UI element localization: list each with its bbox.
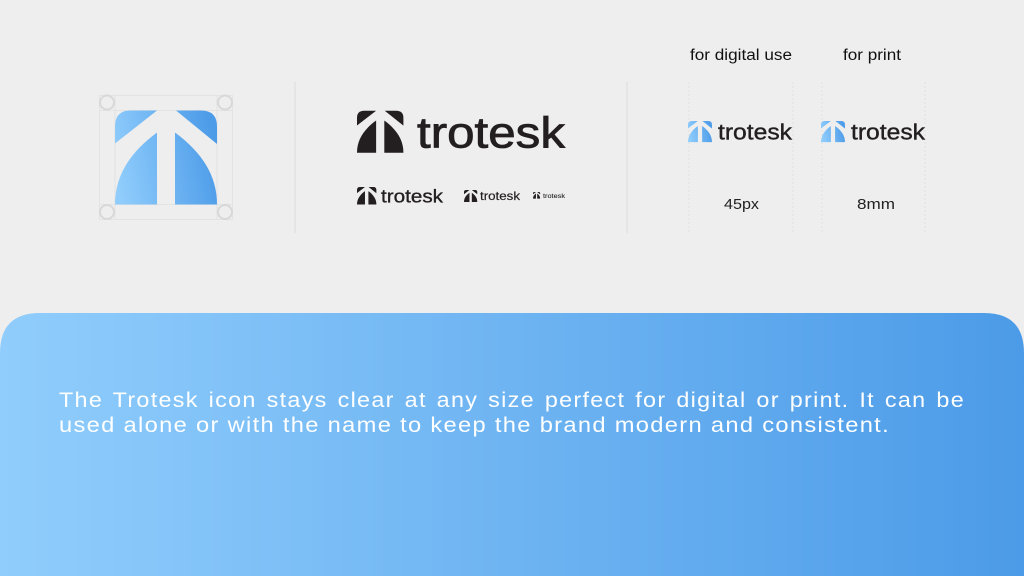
divider left — [294, 82, 296, 233]
heading: for print: for print — [843, 47, 902, 64]
logo: digital gradient — [688, 120, 793, 144]
heading: for digital use: for digital use — [690, 47, 792, 64]
logo: tiny black: trotesk — [543, 193, 566, 200]
label: 45px: 45px — [724, 196, 760, 213]
panel: gradient description — [0, 313, 1024, 576]
logo: small black — [464, 189, 521, 203]
logo: print gradient: trotesk — [851, 120, 926, 144]
icon construction grid — [99, 95, 233, 220]
logo: tiny black — [533, 192, 566, 200]
logo: medium black: trotesk — [381, 186, 444, 206]
logo: medium black — [357, 186, 444, 206]
description text: The Trotesk icon stays clear at any size perfect for digital or print. It can be — [59, 388, 965, 412]
logo: print gradient — [821, 120, 926, 144]
logo: large black — [357, 108, 566, 158]
dashed size guides — [689, 82, 925, 233]
logo: large black: trotesk — [417, 108, 566, 158]
description text — [59, 388, 965, 437]
label: 8mm: 8mm — [857, 196, 895, 213]
icon: large gradient mark — [115, 110, 217, 204]
logo: digital gradient: trotesk — [718, 120, 793, 144]
description text: used alone or with the name to keep the brand modern and consistent. — [59, 413, 890, 437]
divider right — [626, 82, 628, 233]
logo: small black: trotesk — [480, 189, 521, 203]
